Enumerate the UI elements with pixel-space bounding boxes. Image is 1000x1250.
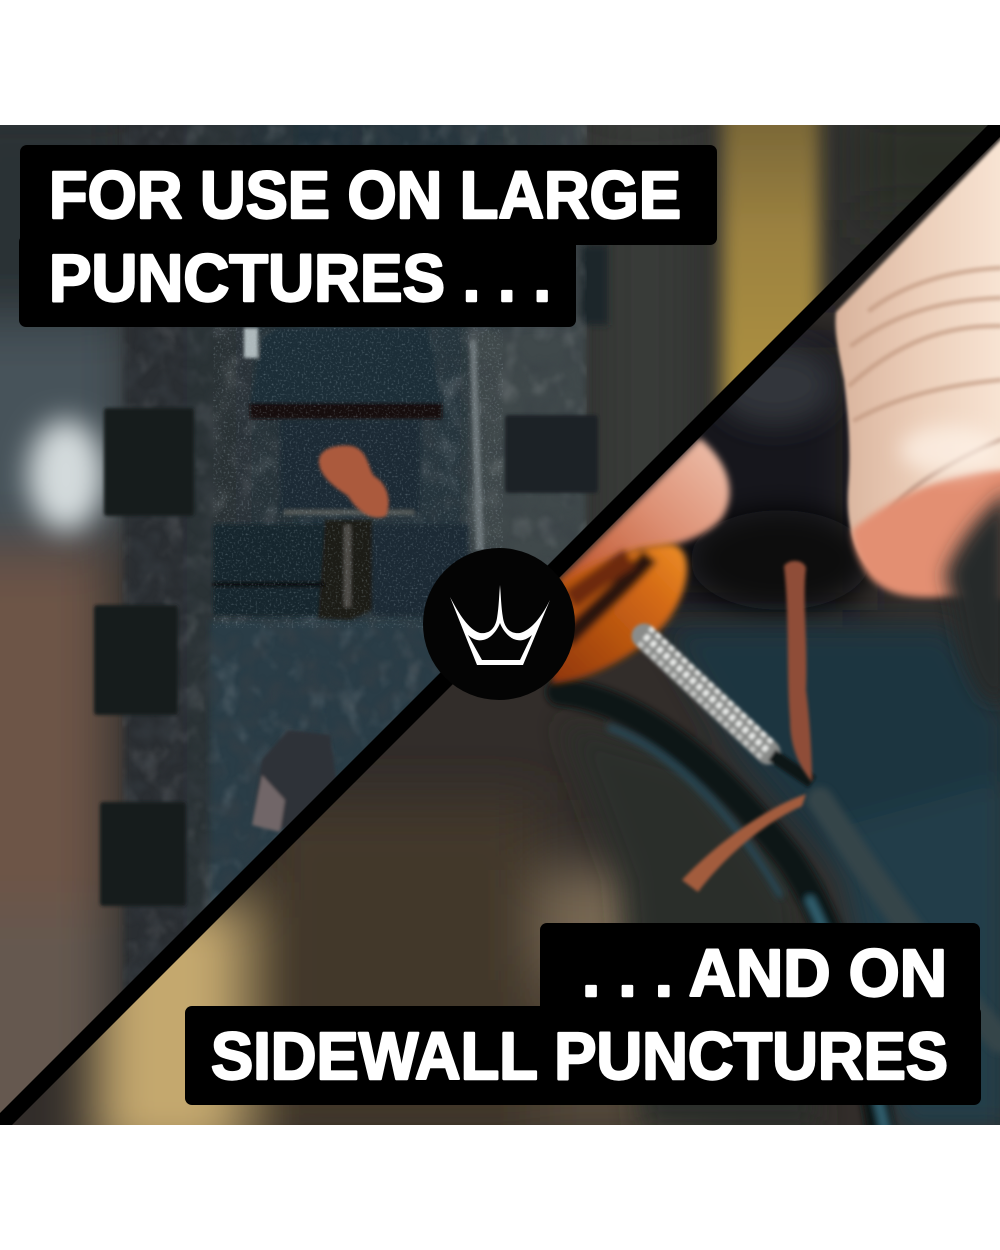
blurred workshop background <box>0 125 972 1113</box>
reamer tool shaft <box>639 628 812 782</box>
caption line 3: . . . AND ON <box>582 936 947 1011</box>
sidewall edge and highlight <box>560 692 1000 1130</box>
bottom caption <box>185 923 981 1105</box>
thumb skin ridges <box>850 268 1000 535</box>
fine grain on tread <box>213 328 503 628</box>
caption line 4: SIDEWALL PUNCTURES <box>211 1019 948 1094</box>
tyre body <box>122 125 612 990</box>
thumb tip <box>852 426 1000 600</box>
infographic canvas <box>0 125 1000 1125</box>
orange tool handle <box>552 544 687 684</box>
repair strips <box>682 561 812 892</box>
tyre texture <box>122 125 587 974</box>
icon: crown <box>450 585 550 665</box>
caption line 2: PUNCTURES . . . <box>49 241 551 316</box>
blurred background <box>95 330 860 1160</box>
tyre sidewall <box>560 625 1000 1130</box>
repair plug in tread <box>319 446 389 518</box>
top caption <box>19 145 717 327</box>
crown logo badge <box>423 548 575 700</box>
photo: large puncture in knobbly tyre <box>0 125 988 1113</box>
caption line 1: FOR USE ON LARGE <box>49 158 681 233</box>
blurred yellow post <box>722 80 820 420</box>
thumb <box>835 130 1000 590</box>
finger <box>560 438 730 600</box>
tread knobs <box>94 328 598 906</box>
glove <box>945 490 1000 700</box>
